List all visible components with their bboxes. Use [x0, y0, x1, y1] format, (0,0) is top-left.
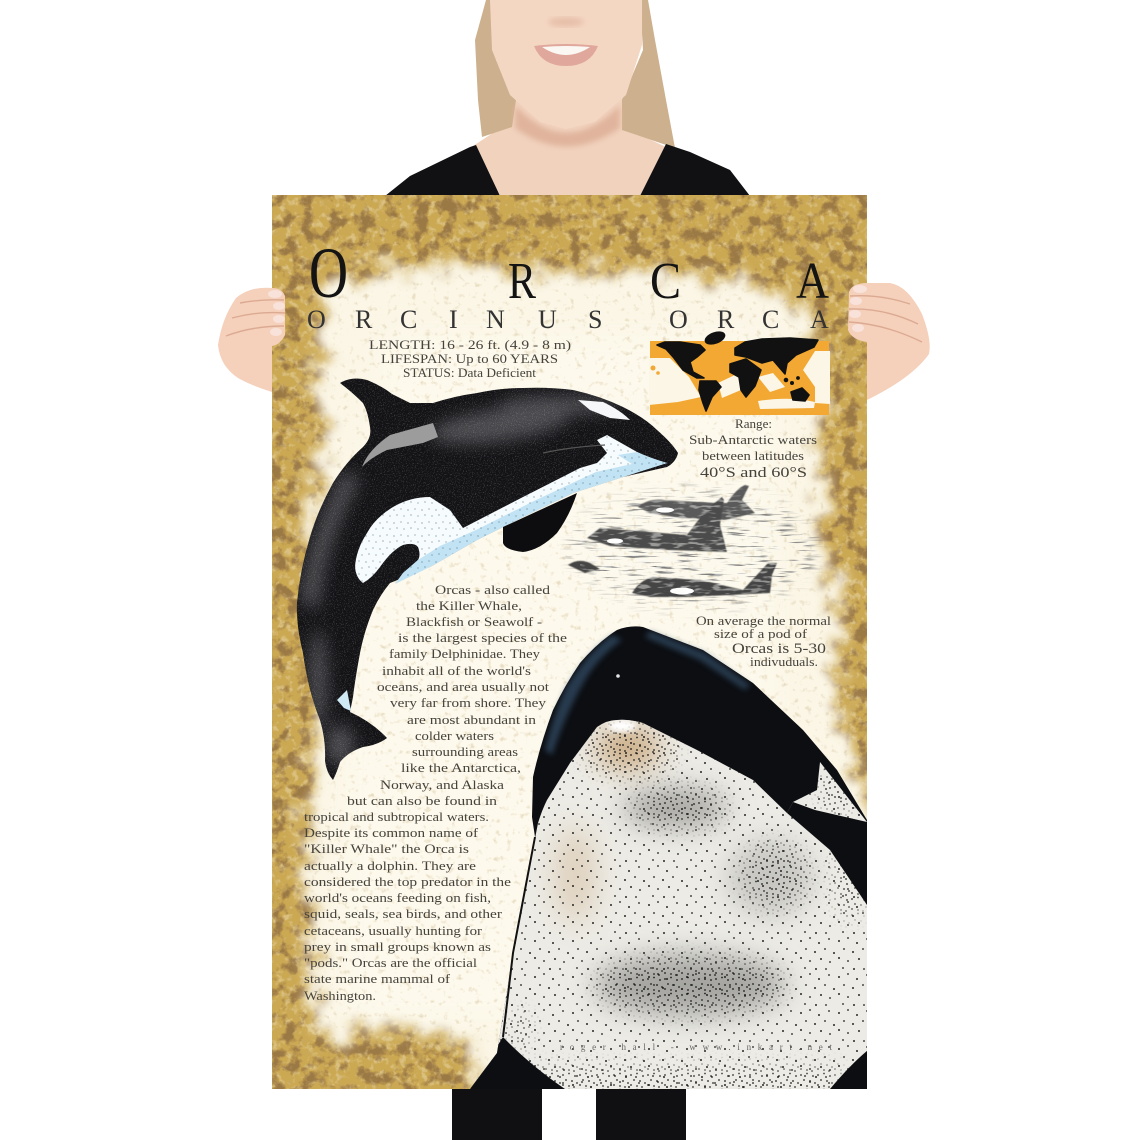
fluke patch [337, 690, 351, 711]
title: ORCA: A [796, 253, 829, 310]
person: legs [452, 1085, 686, 1140]
pod size note: size of a pod of [714, 626, 808, 641]
species facts [369, 337, 571, 380]
body text: squid, seals, sea birds, and other [304, 906, 503, 921]
highlights on pod [580, 484, 780, 600]
artist credit: roger hall - www.inkart.net [560, 1042, 832, 1052]
body text: inhabit all of the world's [382, 663, 531, 678]
range text: Sub-Antarctic waters [689, 432, 817, 447]
title: ORCA: C [650, 253, 681, 310]
body text: tropical and subtropical waters. [304, 809, 489, 824]
pectoral fin [503, 493, 577, 552]
body text: oceans, and area usually not [377, 679, 549, 694]
person: left hand [218, 288, 285, 392]
body text: Blackfish or Seawolf - [406, 614, 542, 629]
species facts: LIFESPAN: Up to 60 YEARS [381, 351, 558, 366]
body text: world's oceans feeding on fish, [304, 890, 491, 905]
white highlight at the chin [608, 720, 636, 732]
range text: Range: [735, 416, 772, 431]
pod size note [696, 613, 831, 669]
body text: surrounding areas [412, 744, 518, 759]
flipper line [543, 445, 605, 453]
person: nose shadow [548, 17, 584, 27]
body text: the Killer Whale, [416, 598, 522, 613]
body text: "Killer Whale" the Orca is [304, 841, 469, 856]
person: neck and chest [470, 90, 668, 196]
body text: Norway, and Alaska [380, 777, 504, 792]
body text: Despite its common name of [304, 825, 479, 840]
person: right hand [848, 283, 930, 400]
pod size note: On average the normal [696, 613, 831, 628]
blue-grey highlights on the black head [545, 631, 750, 755]
black lower corners [470, 1037, 565, 1089]
body text: very far from shore. They [390, 695, 547, 710]
range text: between latitudes [702, 448, 804, 463]
body text: colder waters [415, 728, 494, 743]
body text: like the Antarctica, [401, 760, 521, 775]
rear orca [638, 485, 755, 520]
person: face [490, 0, 642, 146]
leaping orca illustration [290, 370, 690, 790]
title: ORCA: O [309, 233, 348, 313]
range text: 40°S and 60°S [700, 465, 807, 481]
saddle patch [362, 423, 438, 467]
body text: state marine mammal of [304, 971, 451, 986]
range map [649, 330, 830, 415]
pod size note: Orcas is 5-30 [732, 641, 826, 657]
eye patch [578, 400, 630, 420]
orca body shading [290, 370, 690, 790]
body text [304, 582, 567, 1003]
body text: is the largest species of the [398, 630, 567, 645]
body text: but can also be found in [347, 793, 498, 808]
large orca head from below [470, 626, 870, 1095]
dense stipple zones [500, 720, 867, 1089]
species facts: LENGTH: 16 - 26 ft. (4.9 - 8 m) [369, 337, 571, 352]
orca belly and eye patch [337, 400, 667, 711]
species facts: STATUS: Data Deficient [403, 365, 536, 380]
front orca [632, 563, 777, 597]
range text [689, 416, 817, 481]
body text: Orcas - also called [435, 582, 551, 597]
person: mouth [534, 44, 598, 66]
pod size note: indivuduals. [750, 654, 818, 669]
poster: parchment background [272, 195, 880, 1100]
body text: actually a dolphin. They are [304, 858, 476, 873]
throat outline [503, 837, 535, 1037]
white throat with stipple [470, 700, 870, 1095]
title: ORCA: R [508, 253, 536, 310]
body text: are most abundant in [407, 712, 537, 727]
body text: prey in small groups known as [304, 939, 491, 954]
title: ORCA [309, 233, 829, 313]
body text: family Delphinidae. They [389, 646, 541, 661]
throat shading [555, 728, 812, 1015]
person: shirt [385, 144, 750, 196]
black flank band [787, 802, 867, 905]
subtitle: ORCINUS ORCA: ORCINUSORCA [307, 305, 829, 334]
person: hair [475, 0, 675, 148]
body text: considered the top predator in the [304, 874, 511, 889]
body text: "pods." Orcas are the official [304, 955, 477, 970]
middle orca [587, 497, 727, 552]
body text: Washington. [304, 988, 376, 1003]
illustration: orcas at the surface [560, 480, 840, 620]
small surfacing orca [568, 561, 600, 573]
body text: cetaceans, usually hunting for [304, 923, 483, 938]
eye glint [616, 674, 620, 678]
